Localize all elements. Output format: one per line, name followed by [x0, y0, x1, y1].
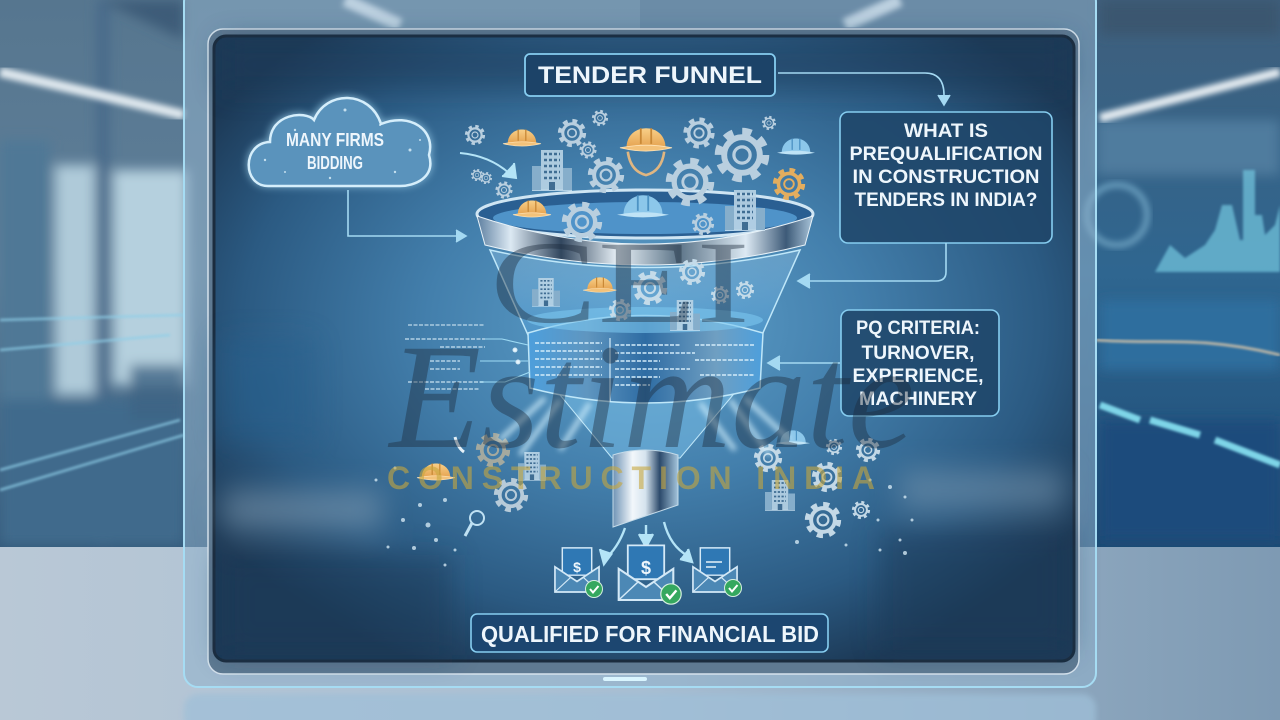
- funnel: [477, 190, 813, 527]
- title box: [525, 54, 775, 96]
- arrow: cloud to funnel: [348, 190, 466, 242]
- question box: TENDERS IN INDIA?: [854, 190, 1038, 211]
- cloud: many firms bidding: MANY FIRMS: [286, 130, 384, 150]
- bottom label: qualified for financial bid: QUALIFIED FOR FINANCIAL BID: [481, 621, 819, 647]
- arrow: criteria to funnel: [768, 356, 840, 370]
- rim back: [477, 190, 813, 238]
- background: blurred office: [0, 0, 1280, 547]
- cloud: many firms bidding: [247, 96, 432, 187]
- icons inside funnel: [532, 261, 753, 330]
- icon: qualified envelopes: [555, 545, 742, 604]
- criteria box: EXPERIENCE,: [852, 366, 984, 387]
- light rays from collar: [500, 398, 790, 455]
- scattered icons right of spout: [756, 430, 878, 535]
- collar: [528, 316, 763, 403]
- rim band: [477, 216, 813, 265]
- arrow: question to funnel: [798, 243, 946, 288]
- icon: qualified envelopes: $: [573, 559, 581, 575]
- watermark: [387, 217, 914, 496]
- arrow: cloud to icons: [460, 153, 516, 178]
- dark bezel: [208, 29, 1079, 674]
- data lines left of collar: [405, 325, 530, 389]
- icon: qualified envelopes: $: [641, 558, 651, 578]
- cloud: many firms bidding: BIDDING: [307, 153, 363, 173]
- watermark: CONSTRUCTION INDIA: [387, 460, 875, 496]
- question box: PREQUALIFICATION: [850, 144, 1042, 165]
- arrows from spout: [600, 522, 692, 564]
- bottom label: qualified for financial bid: [471, 614, 828, 652]
- criteria box: PQ CRITERIA:: [856, 318, 980, 339]
- bottom glow bar: [603, 677, 647, 681]
- criteria box: MACHINERY: [859, 389, 977, 410]
- funnel cone: [490, 250, 800, 335]
- icon cluster above funnel: [467, 111, 815, 239]
- criteria box: [841, 310, 999, 416]
- table surface: [0, 547, 1280, 720]
- watermark: CEI: [490, 217, 750, 348]
- screen panel: [214, 36, 1074, 661]
- scattered icons left of spout: [417, 436, 546, 536]
- glass frame: [184, 0, 1096, 687]
- question box: [840, 112, 1052, 243]
- question box: WHAT IS: [904, 121, 988, 142]
- arrow: title to question: [778, 73, 950, 105]
- background chart: [1155, 170, 1280, 272]
- criteria box: TURNOVER,: [862, 343, 974, 364]
- lower neck: [560, 395, 733, 458]
- question box: IN CONSTRUCTION: [852, 167, 1040, 188]
- frame reflection: [184, 694, 1096, 720]
- particles: [374, 466, 914, 566]
- watermark: Estimate: [387, 314, 914, 480]
- spout: [613, 450, 678, 527]
- title box: TENDER FUNNEL: [538, 62, 762, 89]
- collar data lines: [535, 343, 755, 385]
